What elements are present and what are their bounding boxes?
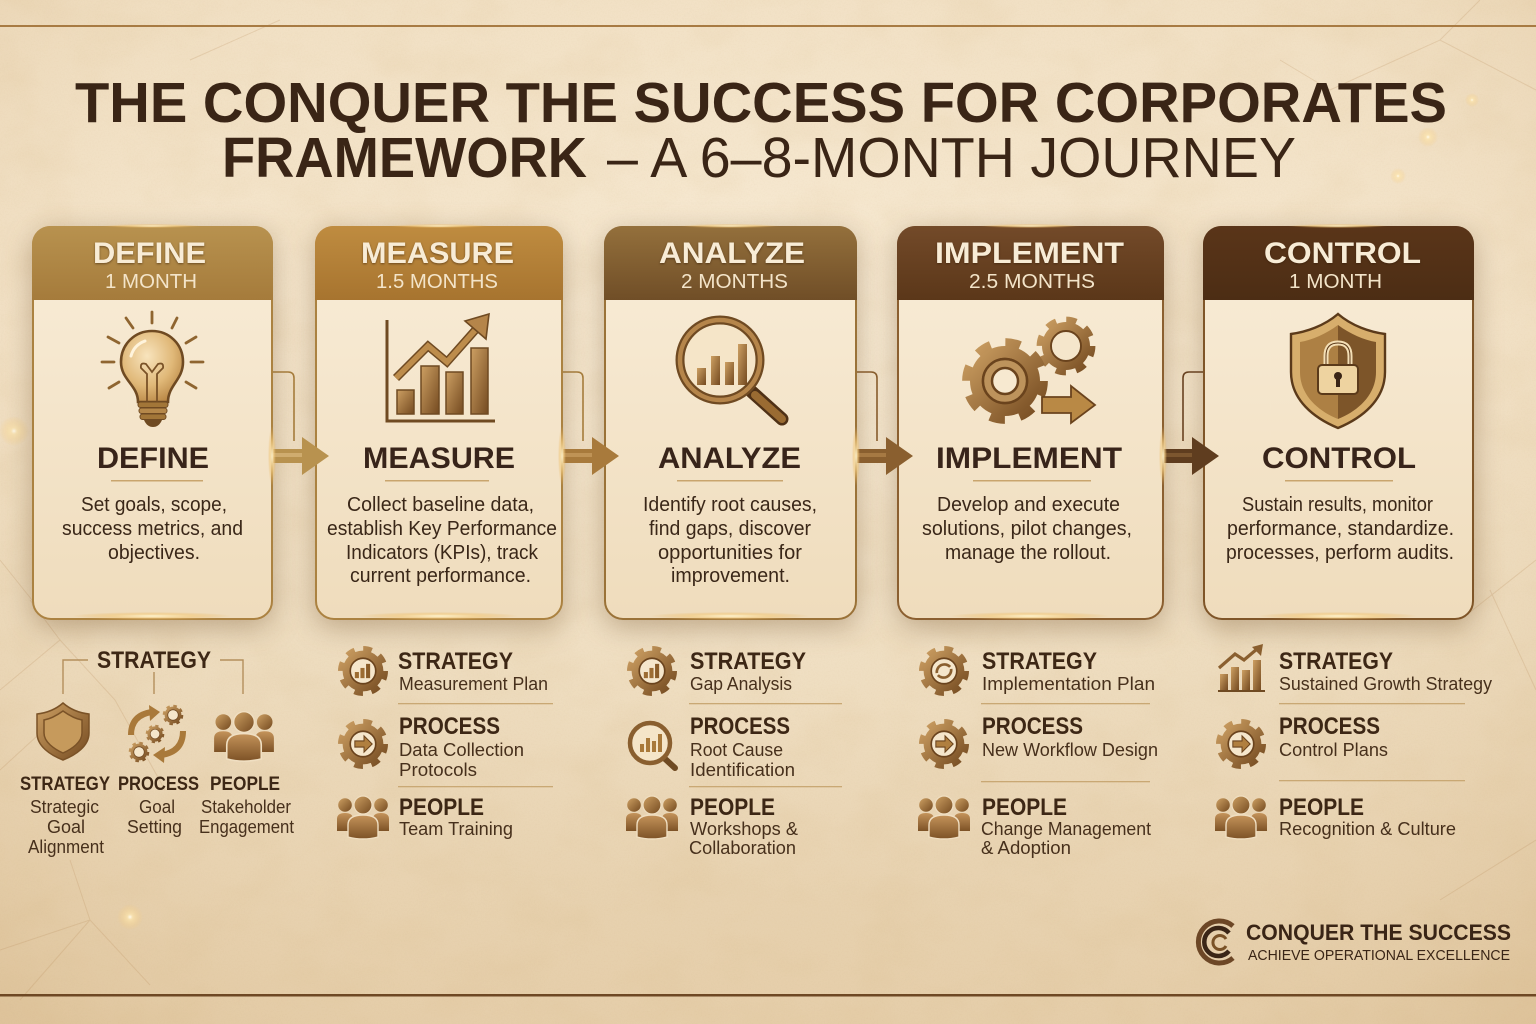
- implement sub-panel: STRATEGY: [982, 648, 1097, 675]
- implement sub-panel: PEOPLE: [982, 794, 1067, 821]
- panel: measure: MEASURE: [361, 237, 514, 270]
- implement sub-panel: Change Management: [981, 819, 1151, 839]
- title: FRAMEWORK: [222, 126, 587, 190]
- icon: shield with padlock: [1291, 314, 1385, 428]
- panel: implement: IMPLEMENT: [936, 442, 1122, 475]
- control description: processes, perform audits.: [1226, 542, 1454, 564]
- arrow: define to measure: [268, 426, 329, 486]
- measure sub-panel: PEOPLE: [399, 794, 484, 821]
- define description: Set goals, scope,: [81, 494, 227, 516]
- implement sub-panel: New Workflow Design: [982, 740, 1158, 760]
- measure description: establish Key Performance: [327, 518, 557, 540]
- title: [75, 71, 1447, 190]
- panel: define: DEFINE: [97, 442, 209, 475]
- measure sub-panel: Data Collection: [399, 740, 524, 760]
- analyze sub-panel: Workshops &: [690, 819, 798, 839]
- control sub-panel: PEOPLE: [1279, 794, 1364, 821]
- panel: analyze: [604, 224, 857, 620]
- panel: define: [32, 224, 273, 620]
- arrow: analyze to implement: [852, 426, 913, 486]
- implement sub-panel: & Adoption: [981, 838, 1071, 858]
- panel: analyze: 2 MONTHS: [681, 271, 788, 293]
- measure header: [315, 226, 563, 300]
- define sub-panel: strategy, process, people: [20, 647, 294, 857]
- analyze sub-panel: Collaboration: [689, 838, 796, 858]
- process column: Goal: [139, 797, 175, 817]
- process column: Setting: [127, 817, 182, 837]
- sparkles: [0, 93, 1479, 930]
- icon: magnifying glass: [680, 320, 782, 419]
- define header: [32, 226, 273, 300]
- control header: [1203, 226, 1474, 300]
- measure sub-panel: Team Training: [399, 819, 513, 839]
- analyze description: [643, 494, 817, 587]
- panel: measure: 1.5 MONTHS: [376, 271, 498, 293]
- control sub-panel: Sustained Growth Strategy: [1279, 674, 1492, 694]
- icon: bar chart with rising arrow: [387, 314, 495, 421]
- analyze sub-panel: Identification: [690, 760, 795, 780]
- control sub-panel: Control Plans: [1279, 740, 1388, 760]
- strategy column: [20, 774, 110, 857]
- analyze description: opportunities for: [658, 542, 802, 564]
- analyze sub-panel: PROCESS: [690, 713, 790, 740]
- panel: control: CONTROL: [1262, 442, 1416, 475]
- icon: people: [918, 796, 970, 839]
- analyze description: find gaps, discover: [649, 518, 811, 540]
- analyze sub-panel: STRATEGY: [690, 648, 806, 675]
- icon: shield: [37, 703, 89, 760]
- implement sub-panel: PROCESS: [982, 713, 1083, 740]
- icon: process cycle: [130, 705, 183, 763]
- implement sub-panel: Implementation Plan: [982, 674, 1155, 694]
- panel: implement: [897, 224, 1164, 620]
- analyze header: [604, 226, 857, 300]
- define description: objectives.: [108, 542, 200, 564]
- arrow: implement to control: [1159, 426, 1219, 486]
- implement description: manage the rollout.: [945, 542, 1111, 564]
- icon: people: [1215, 796, 1267, 839]
- connector lines: [273, 372, 1203, 441]
- control sub-panel: PROCESS: [1279, 713, 1380, 740]
- measure sub-panel: Protocols: [399, 760, 477, 780]
- title: – A 6–8-MONTH JOURNEY: [607, 126, 1296, 190]
- icon: gear with arrow: [1220, 723, 1262, 765]
- panel: control: CONTROL: [1264, 237, 1421, 270]
- measure description: Collect baseline data,: [347, 494, 534, 516]
- title: THE CONQUER THE SUCCESS FOR CORPORATES: [75, 71, 1447, 135]
- analyze sub-panel: Gap Analysis: [690, 674, 792, 694]
- strategy column: STRATEGY: [20, 774, 110, 795]
- analyze description: Identify root causes,: [643, 494, 817, 516]
- panel: measure: MEASURE: [363, 442, 515, 475]
- logo: ACHIEVE OPERATIONAL EXCELLENCE: [1248, 948, 1510, 964]
- panel: define: 1 MONTH: [105, 271, 197, 293]
- icon: gear with cycle: [923, 650, 965, 692]
- measure sub-panel: [337, 648, 553, 839]
- measure description: current performance.: [350, 565, 531, 587]
- logo: CONQUER THE SUCCESS: [1246, 920, 1511, 945]
- control description: Sustain results, monitor: [1242, 494, 1433, 516]
- implement sub-panel: [918, 648, 1158, 858]
- analyze sub-panel: [626, 648, 842, 858]
- measure sub-panel: Measurement Plan: [399, 674, 548, 694]
- strategy column: Alignment: [28, 837, 104, 857]
- implement description: Develop and execute: [937, 494, 1120, 516]
- icon: small chart with arrow: [1218, 644, 1265, 692]
- panel: implement: IMPLEMENT: [935, 237, 1124, 270]
- measure sub-panel: STRATEGY: [398, 648, 513, 675]
- icon: gears and arrow: [968, 321, 1095, 423]
- logo: [1198, 920, 1511, 964]
- people column: [199, 774, 294, 837]
- arrow: measure to analyze: [558, 426, 619, 486]
- measure description: Indicators (KPIs), track: [346, 542, 539, 564]
- panel: analyze: ANALYZE: [659, 237, 805, 270]
- icon: magnifier: [630, 723, 675, 768]
- define description: [62, 494, 243, 564]
- define sub-panel: strategy, process, people: STRATEGY: [97, 647, 211, 674]
- panel: implement: 2.5 MONTHS: [969, 271, 1095, 293]
- panel: measure: [315, 224, 563, 620]
- icon: gear with arrow: [342, 723, 384, 765]
- analyze sub-panel: Root Cause: [690, 740, 783, 760]
- panel: define: DEFINE: [93, 237, 206, 270]
- icon: gear with arrow: [923, 723, 965, 765]
- panel: control: 1 MONTH: [1289, 271, 1382, 293]
- implement description: [922, 494, 1132, 564]
- icon: people: [214, 712, 274, 761]
- strategy column: Strategic: [30, 797, 99, 817]
- control sub-panel: Recognition & Culture: [1279, 819, 1456, 839]
- control description: performance, standardize.: [1227, 518, 1454, 540]
- process column: [118, 774, 199, 837]
- people column: Stakeholder: [201, 797, 291, 817]
- icon: light bulb: [102, 312, 203, 427]
- control description: [1226, 494, 1454, 564]
- analyze description: improvement.: [671, 565, 790, 587]
- control sub-panel: [1215, 644, 1492, 839]
- control sub-panel: STRATEGY: [1279, 648, 1393, 675]
- strategy column: Goal: [47, 817, 85, 837]
- icon: gear with bars: [631, 650, 673, 692]
- process column: PROCESS: [118, 774, 199, 795]
- define description: success metrics, and: [62, 518, 243, 540]
- icon: people: [626, 796, 678, 839]
- icon: gear with bars: [342, 650, 384, 692]
- icon: people: [337, 796, 389, 839]
- implement header: [897, 226, 1164, 300]
- panel: control: [1203, 224, 1474, 620]
- implement description: solutions, pilot changes,: [922, 518, 1132, 540]
- logo mark: [1198, 921, 1233, 963]
- measure description: [327, 494, 557, 587]
- people column: Engagement: [199, 817, 294, 837]
- people column: PEOPLE: [210, 774, 280, 795]
- analyze sub-panel: PEOPLE: [690, 794, 775, 821]
- panel: analyze: ANALYZE: [658, 442, 801, 475]
- measure sub-panel: PROCESS: [399, 713, 500, 740]
